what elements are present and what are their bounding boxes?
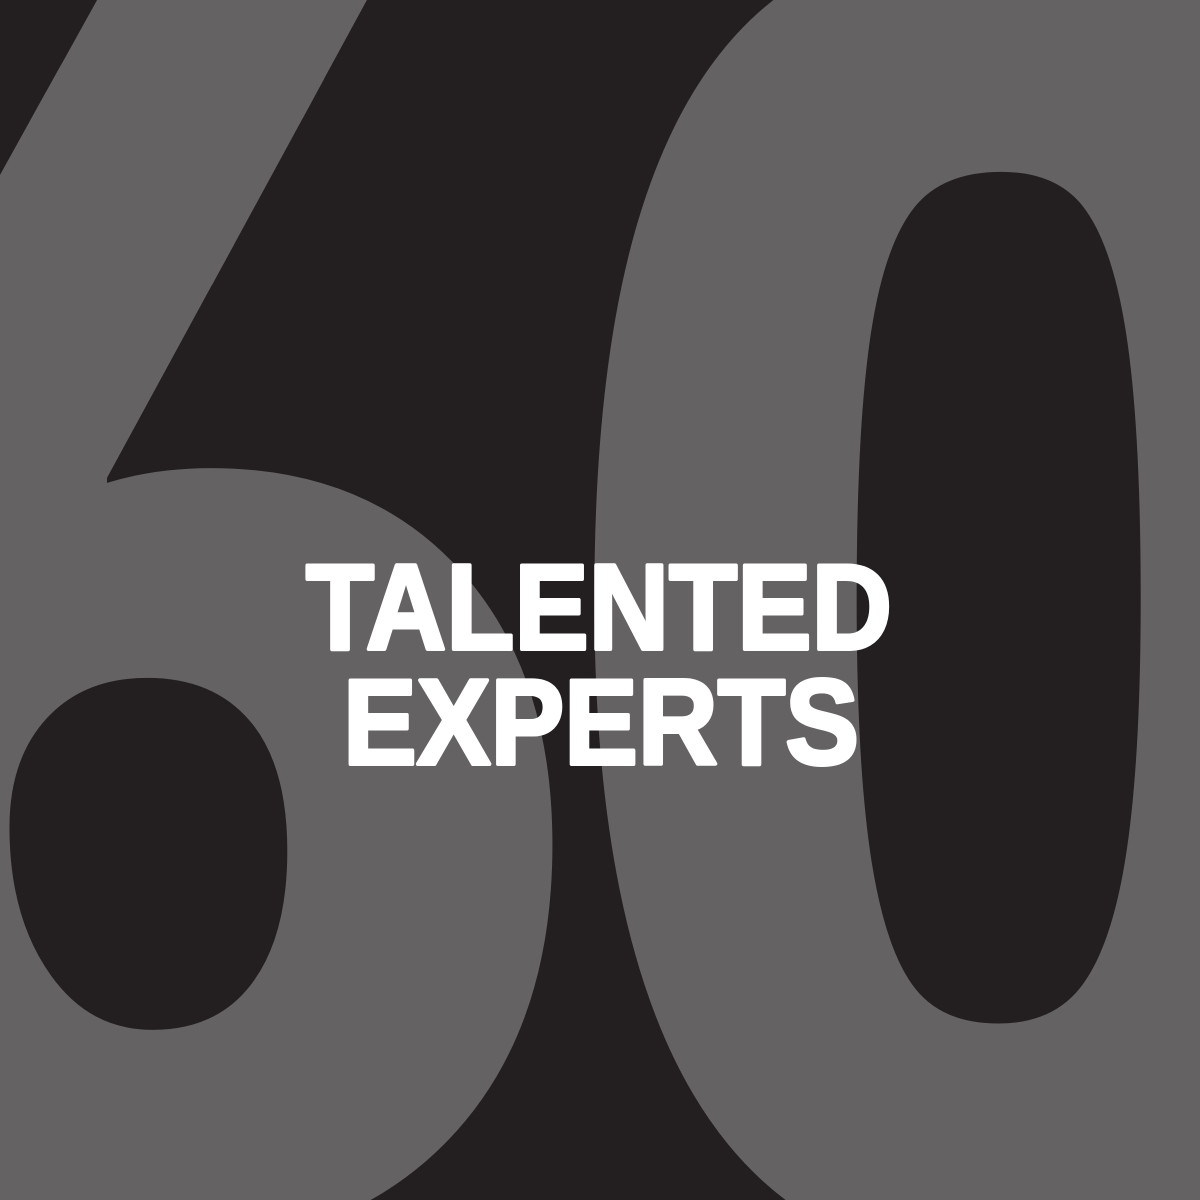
headline <box>306 539 892 790</box>
digit 6 <box>0 0 588 1200</box>
diagonal stem of digit 6 <box>0 0 367 543</box>
headline line 2: EXPERTS <box>343 654 859 790</box>
headline line 1: TALENTED <box>306 539 892 675</box>
